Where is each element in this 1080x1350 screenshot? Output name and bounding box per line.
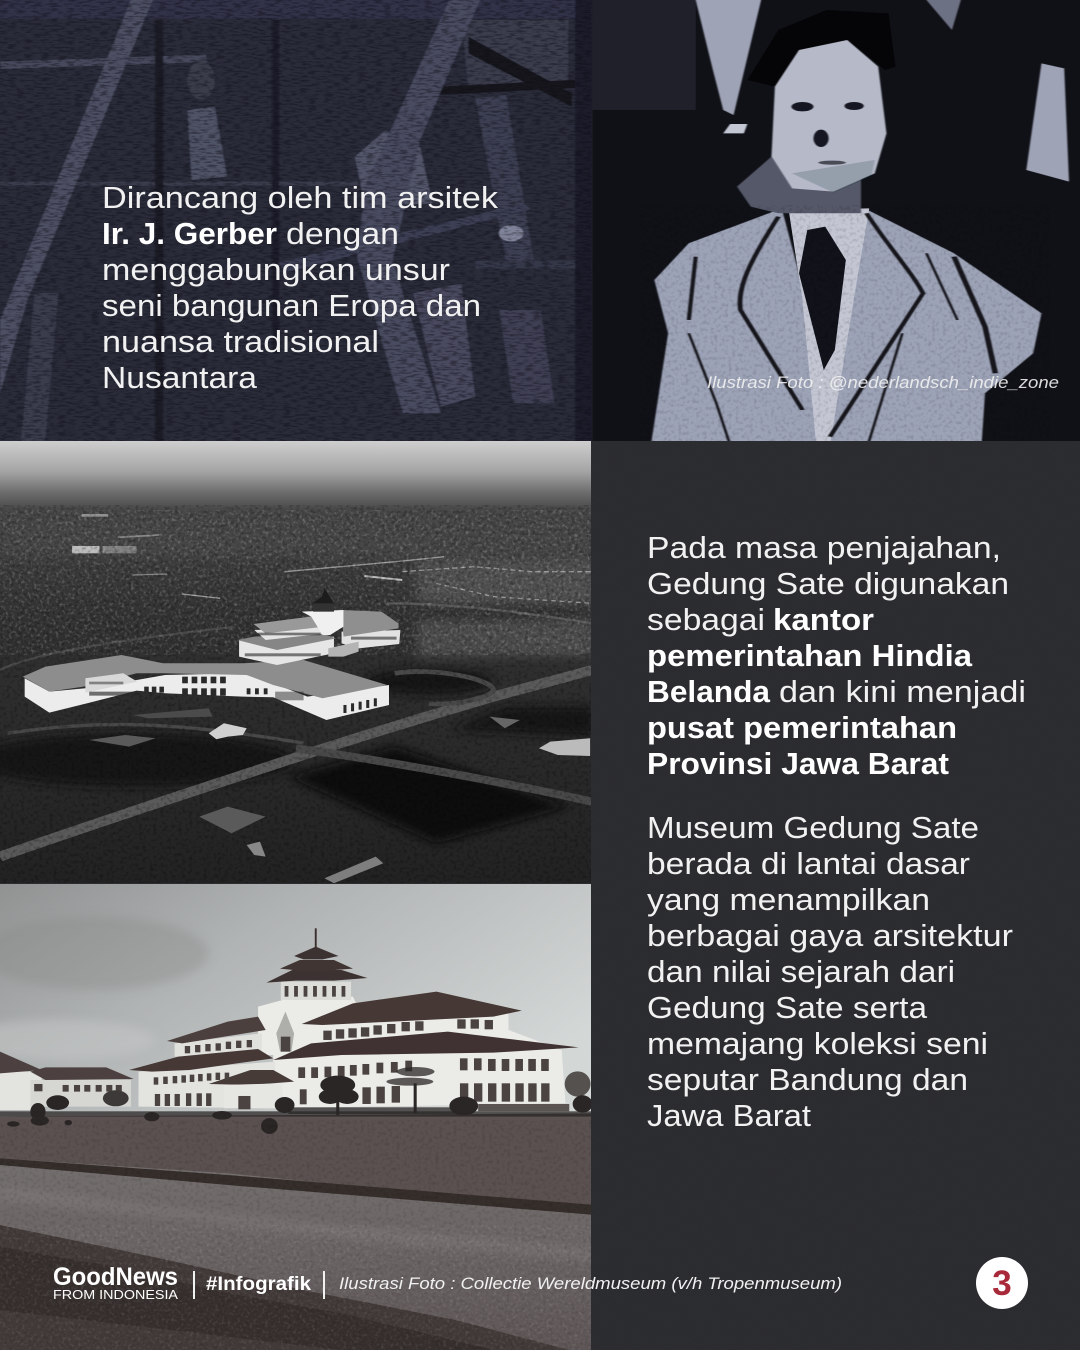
face (771, 40, 886, 192)
building roofs and walls (23, 588, 400, 720)
text block: colonial use: Gedung Sate digunakan (647, 566, 1009, 601)
text block: colonial use: Belanda (647, 674, 771, 709)
text block: architect description: Nusantara (102, 360, 258, 395)
page number badge: 3 (992, 1264, 1012, 1303)
text block: architect description: Dirancang oleh tim arsitek (102, 180, 499, 215)
text block: museum: Jawa Barat (647, 1098, 811, 1133)
text block: museum: Museum Gedung Sate (647, 810, 979, 845)
text block: architect description: menggabungkan unsur (102, 252, 450, 287)
text block: architect description: dengan (286, 216, 399, 251)
photo credit: bottom: Ilustrasi Foto : Collectie Wereldmuseum (v/h Tropenmuseum) (339, 1274, 842, 1293)
photo credit: top: Ilustrasi Foto : @nederlandsch_indie_zone (707, 373, 1059, 392)
text block: colonial use: sebagai (647, 602, 765, 637)
photo: architect and construction workers, blue duotone (0, 0, 1080, 445)
text block: museum: seputar Bandung dan (647, 1062, 968, 1097)
text block: museum: berada di lantai dasar (647, 846, 970, 881)
panel grain (591, 441, 1080, 1350)
panel: right text background (591, 441, 1080, 1350)
building (0, 947, 579, 1110)
text block: colonial use: pemerintahan Hindia (647, 638, 973, 673)
logo: GoodNews from Indonesia (53, 1263, 179, 1302)
text block: architect description: nuansa tradisional (102, 324, 379, 359)
text block: colonial use: pusat pemerintahan (647, 710, 957, 745)
text block: architect description (102, 180, 499, 395)
foreground details (89, 708, 590, 883)
trees and hedge (0, 1067, 595, 1134)
arches and windows (89, 633, 397, 713)
hashtag: Infografik: #Infografik (206, 1274, 311, 1295)
text block: museum: dan nilai sejarah dari (647, 954, 955, 989)
text block: museum: berbagai gaya arsitektur (647, 918, 1013, 953)
text block: museum: Gedung Sate serta (647, 990, 928, 1025)
text block: colonial use: kantor (773, 602, 874, 637)
photo: aerial view of Gedung Sate (0, 440, 595, 885)
logo: GoodNews from Indonesia: GoodNews (53, 1263, 178, 1291)
text block: architect description: Ir. J. Gerber (102, 216, 277, 251)
suit jacket (651, 208, 1041, 445)
hashtag: Infografik (193, 1271, 325, 1299)
text block: museum: memajang koleksi seni (647, 1026, 988, 1061)
text block: colonial use: Pada masa penjajahan, (647, 530, 1001, 565)
photo: Gedung Sate front view, sepia (0, 880, 595, 1350)
logo: GoodNews from Indonesia: FROM INDONESIA (53, 1288, 179, 1302)
neck and collar (737, 157, 861, 213)
hair (747, 10, 895, 87)
text block: colonial use (647, 530, 1026, 781)
text block: museum: yang menampilkan (647, 882, 930, 917)
windows (34, 986, 550, 1109)
road bands (10, 1194, 588, 1256)
text block: colonial use: Provinsi Jawa Barat (647, 746, 949, 781)
text block: architect description: seni bangunan Eropa dan (102, 288, 481, 323)
text block: colonial use: dan kini menjadi (779, 674, 1026, 709)
page number badge (976, 1257, 1028, 1309)
text block: museum (647, 810, 1013, 1133)
